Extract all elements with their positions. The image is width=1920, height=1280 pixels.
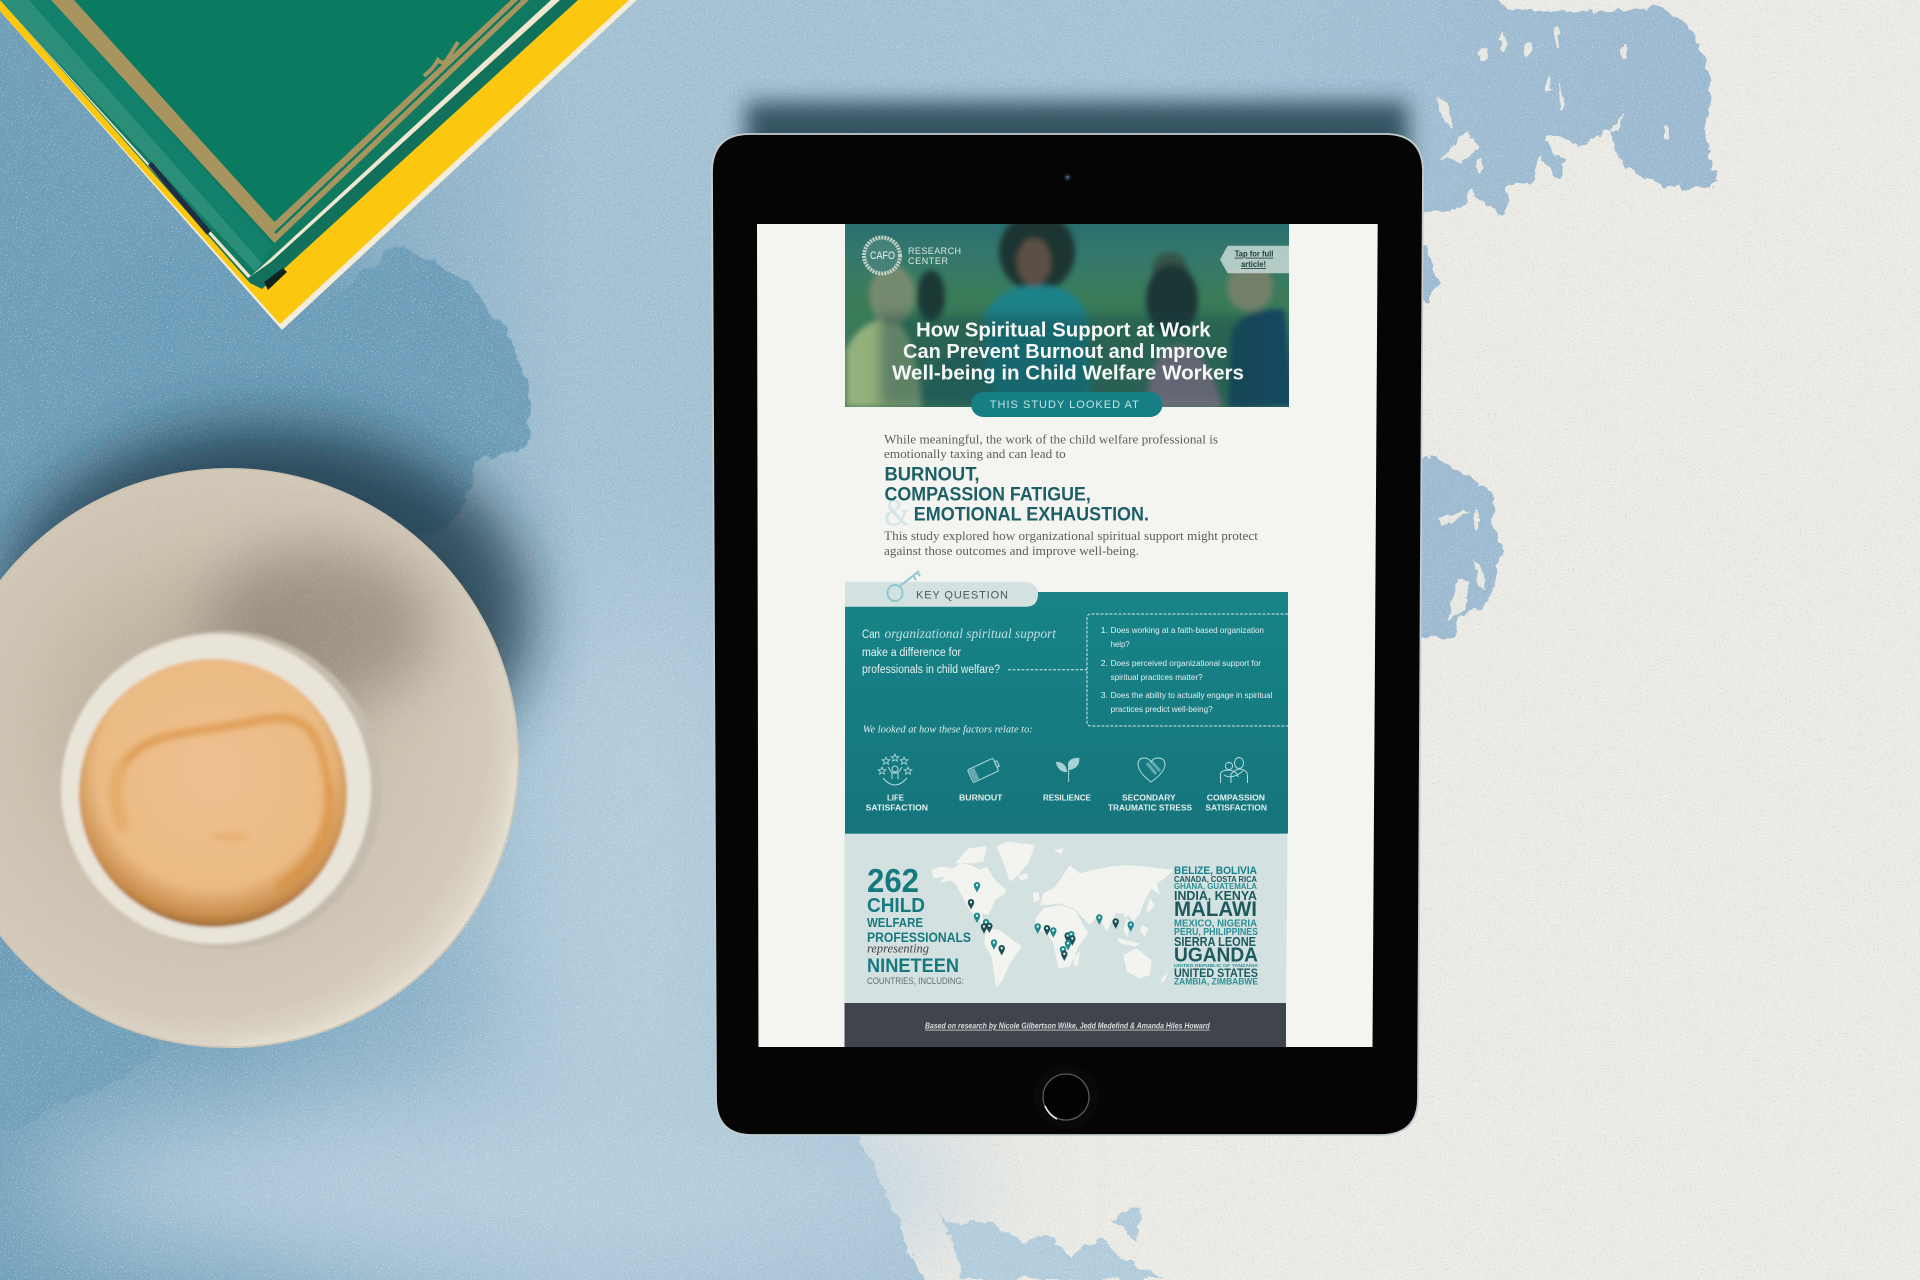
numbered questions: 1. — [1101, 625, 1108, 635]
question text — [862, 627, 1057, 676]
country word list: UGANDA — [1174, 944, 1258, 966]
factors lead-in: We looked at how these factors relate to: — [863, 724, 1033, 736]
tap for full article flag — [1220, 246, 1289, 273]
saucer — [0, 460, 530, 1060]
key question tab: KEY QUESTION — [916, 590, 1008, 602]
numbered questions: help? — [1111, 639, 1130, 649]
icon: life satisfaction — [878, 754, 912, 785]
panel: participants and map — [844, 834, 1288, 1003]
icon: secondary traumatic stress heart — [1138, 758, 1165, 782]
factor labels: BURNOUT — [959, 793, 1003, 803]
question text: Can — [862, 629, 880, 641]
dashed connector and box — [1008, 614, 1288, 726]
factor labels: SATISFACTION — [1205, 803, 1267, 813]
coffee cup — [61, 631, 382, 949]
question text: organizational spiritual support — [884, 627, 1057, 642]
title — [892, 319, 1244, 384]
logo: CENTER — [908, 256, 948, 266]
country word list: ZAMBIA, ZIMBABWE — [1174, 976, 1258, 986]
country word list: GHANA, GUATEMALA — [1174, 882, 1257, 891]
footer: research credit: Based on research by Nicole Gilbertson Wilke, Jedd Medefind & Amanda Hiles Howard — [925, 1022, 1210, 1031]
dark stain lower left — [0, 1000, 160, 1130]
intro paragraph: While meaningful, the work of the child welfare professional is — [884, 432, 1218, 446]
country word list: UNITED REPUBLIC OF TANZANIA — [1174, 963, 1259, 968]
factor labels — [866, 793, 1267, 813]
numbered questions: Does perceived organizational support for — [1111, 658, 1261, 668]
country word list: CANADA, COSTA RICA — [1174, 874, 1257, 884]
tablet screen with infographic — [757, 212, 1378, 1047]
study paragraph: against those outcomes and improve well-being. — [884, 544, 1139, 558]
header photo with teal overlay — [845, 212, 1295, 407]
participant statistics: 262 — [867, 862, 919, 899]
country word list: UNITED STATES — [1174, 966, 1258, 980]
participant statistics: representing — [867, 942, 929, 956]
numbered questions: 2. — [1101, 658, 1108, 668]
cream flecks in the stained area — [1436, 27, 1670, 620]
tablet cast shadow — [746, 102, 1408, 170]
ampersand decoration: & — [884, 492, 910, 534]
numbered questions: Does the ability to actually engage in spiritual — [1111, 690, 1272, 700]
saucer shadow — [0, 425, 530, 805]
participant statistics: PROFESSIONALS — [867, 930, 971, 945]
numbered questions: Does working at a faith-based organization — [1111, 625, 1264, 635]
key question tab — [845, 582, 1038, 607]
icon: burnout battery — [967, 757, 1001, 783]
factor labels: TRAUMATIC STRESS — [1108, 803, 1192, 813]
tablet body — [712, 134, 1423, 1135]
lighter wash on the lower surface — [20, 580, 980, 1275]
country word list: SIERRA LEONE — [1174, 935, 1256, 949]
outcomes heading — [884, 465, 1149, 526]
factor labels: RESILIENCE — [1043, 793, 1091, 803]
world map — [932, 842, 1173, 988]
key question panel — [845, 571, 1288, 834]
map pins — [968, 882, 1134, 961]
icon: resilience sprout — [1056, 758, 1079, 782]
factor labels: SATISFACTION — [866, 803, 928, 813]
country word list — [1174, 865, 1259, 986]
numbered questions: 3. — [1101, 690, 1108, 700]
icon: key — [888, 571, 920, 601]
factor labels: LIFE — [887, 793, 904, 803]
intro paragraph: emotionally taxing and can lead to — [884, 447, 1066, 461]
tap for full article flag: article! — [1241, 260, 1266, 269]
country word list: MEXICO, NIGERIA — [1174, 918, 1257, 930]
country word list: PERU, PHILIPPINES — [1174, 927, 1258, 938]
participant statistics — [867, 862, 971, 987]
book corner, green cover with yellow edge — [0, 0, 637, 330]
participant statistics: COUNTRIES, INCLUDING: — [867, 976, 964, 987]
numbered questions: practices predict well-being? — [1111, 704, 1213, 714]
tablet home button — [1033, 1065, 1099, 1129]
title: Can Prevent Burnout and Improve — [903, 340, 1228, 363]
logo: RESEARCH — [908, 246, 961, 256]
participant statistics: NINETEEN — [867, 956, 959, 977]
country word list: BELIZE, BOLIVIA — [1174, 865, 1257, 877]
outcomes heading: COMPASSION FATIGUE, — [884, 485, 1091, 506]
title: Well-being in Child Welfare Workers — [892, 361, 1244, 384]
country word list: INDIA, KENYA — [1174, 888, 1258, 903]
logo — [864, 238, 961, 274]
intro paragraph — [884, 432, 1218, 461]
numbered questions: spiritual practices matter? — [1111, 672, 1203, 682]
country word list: MALAWI — [1174, 898, 1257, 921]
logo: CAFO — [870, 250, 895, 262]
title: How Spiritual Support at Work — [916, 319, 1211, 342]
numbered questions — [1101, 625, 1272, 714]
question text: professionals in child welfare? — [862, 664, 1000, 676]
icon: compassion satisfaction — [1220, 758, 1248, 783]
this study looked at pill: THIS STUDY LOOKED AT — [990, 399, 1139, 411]
tablet camera — [1064, 174, 1071, 181]
study paragraph: This study explored how organizational spiritual support might protect — [884, 529, 1259, 543]
coffee swirl — [116, 718, 329, 885]
factor labels: SECONDARY — [1122, 793, 1176, 803]
factor labels: COMPASSION — [1207, 793, 1265, 803]
outcomes heading: BURNOUT, — [884, 465, 980, 486]
tap for full article flag: Tap for full — [1235, 250, 1273, 259]
participant statistics: CHILD — [867, 895, 925, 917]
question text: make a difference for — [862, 647, 961, 659]
study paragraph — [884, 529, 1259, 558]
footer: research credit — [844, 1003, 1286, 1047]
darker blue field upper left — [90, 210, 370, 510]
outcomes heading: EMOTIONAL EXHAUSTION. — [914, 505, 1149, 526]
participant statistics: WELFARE — [867, 915, 923, 930]
this study looked at pill — [971, 392, 1162, 417]
water stain left of the tablet — [240, 245, 533, 560]
